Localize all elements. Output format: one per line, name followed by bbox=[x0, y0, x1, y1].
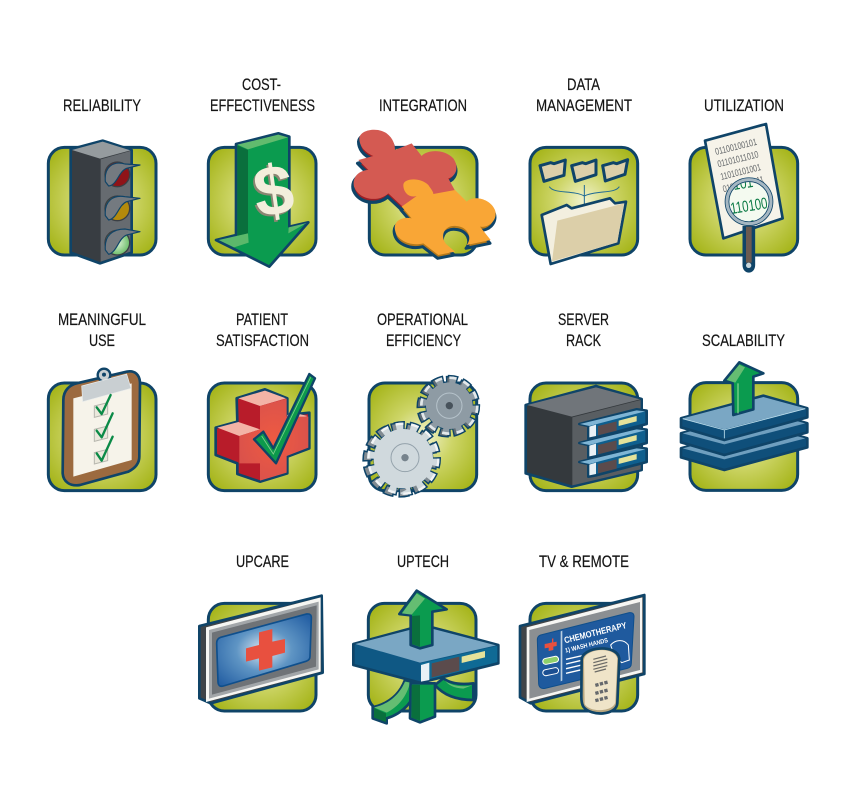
icon: red cross and check bbox=[208, 374, 316, 491]
icon: traffic light bbox=[48, 141, 156, 263]
label: patient satisfaction: SATISFACTION bbox=[216, 331, 309, 350]
icon: clipboard bbox=[48, 369, 156, 491]
label: operational efficiency: EFFICIENCY bbox=[386, 331, 461, 350]
icon: down arrow with dollar: $ bbox=[249, 149, 299, 232]
icon: paper and magnifier: 01100100101 bbox=[714, 137, 758, 158]
screen bbox=[537, 613, 634, 688]
label: server rack bbox=[558, 310, 609, 350]
server drawer 1 bbox=[579, 409, 647, 439]
layer 2 bbox=[681, 411, 807, 455]
panel: utilization bbox=[690, 96, 798, 272]
label: tv and remote: TV & REMOTE bbox=[539, 552, 629, 571]
label: uptech: UPTECH bbox=[397, 552, 449, 571]
magnifier lens bbox=[728, 180, 770, 223]
label: operational efficiency bbox=[377, 310, 468, 350]
label: data management: DATA bbox=[567, 75, 600, 94]
icon: folders bbox=[530, 147, 638, 264]
label: cost-effectiveness: EFFECTIVENESS bbox=[210, 96, 315, 115]
label: cost-effectiveness bbox=[210, 75, 315, 115]
gear: dark bbox=[421, 378, 477, 434]
icon: layers and up arrow bbox=[681, 362, 807, 490]
panel: uptech bbox=[353, 552, 498, 723]
label: data management: MANAGEMENT bbox=[536, 96, 632, 115]
magnifier handle bbox=[743, 227, 754, 272]
label: meaningful use: USE bbox=[89, 331, 115, 350]
panel: tv and remote bbox=[520, 552, 644, 714]
label: patient satisfaction bbox=[216, 310, 309, 350]
label: reliability: RELIABILITY bbox=[63, 96, 141, 115]
label: meaningful use: MEANINGFUL bbox=[58, 310, 146, 329]
main folder bbox=[542, 198, 626, 264]
layer 1 bbox=[681, 396, 807, 440]
icon: paper and magnifier: 101 bbox=[732, 174, 754, 194]
icon: monitor with cross bbox=[199, 596, 323, 711]
clip bbox=[82, 369, 131, 402]
icon: paper and magnifier: 01010100011 bbox=[722, 174, 765, 195]
panel: cost-effectiveness bbox=[208, 75, 316, 267]
label: meaningful use bbox=[58, 310, 146, 350]
icon: puzzle pieces bbox=[353, 130, 496, 258]
screen text: CHEMOTHERAPY bbox=[563, 620, 628, 645]
panel: reliability bbox=[48, 96, 156, 263]
icon: paper and magnifier: 110100 bbox=[729, 195, 769, 218]
label: scalability: SCALABILITY bbox=[702, 331, 785, 350]
panel: upcare bbox=[199, 552, 323, 711]
label: operational efficiency: OPERATIONAL bbox=[377, 310, 468, 329]
label: utilization: UTILIZATION bbox=[704, 96, 784, 115]
panel: patient satisfaction bbox=[208, 310, 316, 491]
icon: paper and magnifier: 100 bbox=[735, 218, 758, 238]
panel: scalability bbox=[681, 331, 807, 490]
icon: down arrow with dollar bbox=[208, 133, 316, 267]
layer 3 bbox=[681, 426, 807, 470]
lower arrows bbox=[373, 678, 473, 723]
icon: server with arrows bbox=[353, 591, 498, 723]
remote bbox=[581, 648, 619, 714]
screen text: 1) WASH HANDS bbox=[564, 637, 609, 655]
screen text bbox=[563, 620, 628, 655]
server drawer 2 bbox=[579, 428, 647, 458]
label: cost-effectiveness: COST- bbox=[242, 75, 281, 94]
label: server rack: RACK bbox=[566, 331, 601, 350]
icon: paper and magnifier bbox=[690, 124, 798, 272]
checklist bbox=[94, 403, 108, 464]
panel: operational efficiency bbox=[367, 310, 477, 494]
connector lines bbox=[549, 185, 619, 212]
icon: down arrow with dollar: $ bbox=[247, 151, 297, 234]
icon: paper and magnifier: 01101011010 bbox=[716, 149, 760, 170]
label: data management bbox=[536, 75, 632, 115]
panel: integration bbox=[353, 96, 496, 258]
server drawer 3 bbox=[579, 447, 647, 477]
panel: server rack bbox=[526, 310, 647, 491]
small folders bbox=[540, 160, 628, 181]
label: upcare: UPCARE bbox=[236, 552, 289, 571]
icon: tv with remote bbox=[520, 595, 644, 714]
up arrow bbox=[399, 591, 447, 648]
label: patient satisfaction: PATIENT bbox=[236, 310, 288, 329]
sidebar symbols bbox=[542, 638, 559, 676]
icon set bbox=[46, 78, 809, 725]
icon: server rack bbox=[526, 383, 647, 491]
up arrow bbox=[724, 362, 763, 415]
panel: meaningful use bbox=[48, 310, 156, 491]
label: integration: INTEGRATION bbox=[379, 96, 467, 115]
server box bbox=[353, 625, 498, 683]
icon: paper and magnifier: 11010101001 bbox=[719, 162, 762, 183]
label: server rack: SERVER bbox=[558, 310, 609, 329]
icon: gears bbox=[367, 378, 477, 494]
panel: data management bbox=[530, 75, 638, 264]
gear: light bbox=[367, 424, 438, 494]
